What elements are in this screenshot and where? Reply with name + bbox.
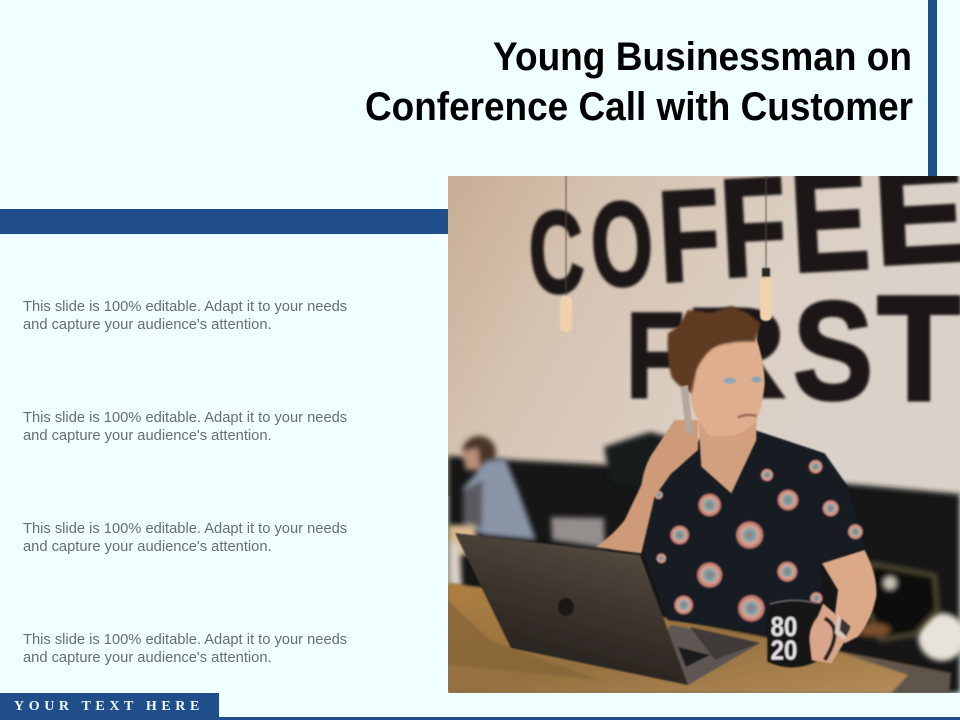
coffee mug with hand <box>767 600 851 667</box>
background table and pillow <box>448 517 960 661</box>
coffee mug with hand: 20 <box>771 634 797 665</box>
phone <box>681 385 693 435</box>
wall lettering: COFFEE FIRST: O <box>587 176 656 313</box>
text block 3: and capture your audience's attention. <box>23 539 272 555</box>
wall lettering: COFFEE FIRST: T <box>877 265 960 432</box>
text block 4: and capture your audience's attention. <box>23 650 272 666</box>
wall lettering: COFFEE FIRST: S <box>793 272 873 429</box>
shirt rosette pattern <box>654 459 863 622</box>
hair <box>668 306 761 393</box>
table <box>448 583 951 693</box>
bag <box>854 563 938 640</box>
accent bar: left horizontal <box>0 209 448 234</box>
text block 1: This slide is 100% editable. Adapt it to your needs <box>23 299 347 315</box>
text block 1: and capture your audience's attention. <box>23 317 272 333</box>
text block 3: This slide is 100% editable. Adapt it to your needs <box>23 521 347 537</box>
pendant lamps <box>560 176 772 332</box>
wall lettering: COFFEE FIRST: R <box>685 282 786 425</box>
back bench <box>448 456 960 693</box>
jacket on bench <box>604 432 680 500</box>
right arm <box>822 550 877 643</box>
laptop base <box>660 625 760 685</box>
wall lettering: COFFEE FIRST: C <box>525 186 587 319</box>
text block 1 <box>23 299 347 333</box>
businessman <box>596 417 877 667</box>
text block 4: This slide is 100% editable. Adapt it to your needs <box>23 632 347 648</box>
text block 4 <box>23 632 347 666</box>
title <box>365 35 913 129</box>
laptop logo <box>558 598 574 616</box>
text block 2: This slide is 100% editable. Adapt it to your needs <box>23 410 347 426</box>
photo: businessman on phone in coffee shop <box>448 176 960 693</box>
open neck <box>698 417 756 493</box>
text block 2: and capture your audience's attention. <box>23 428 272 444</box>
text block 3 <box>23 521 347 555</box>
coffee mug with hand: 80 <box>771 611 797 642</box>
face <box>691 338 765 437</box>
eyes and mouth <box>724 376 761 417</box>
background person <box>462 436 536 540</box>
footer tag: YOUR TEXT HERE <box>14 699 204 714</box>
footer tag <box>0 693 219 720</box>
bottom rule <box>0 717 960 720</box>
head <box>668 306 765 437</box>
laptop <box>455 533 760 685</box>
wall <box>448 176 960 496</box>
accent bar: top right vertical <box>928 0 937 176</box>
shirt <box>643 430 865 633</box>
wall lettering: COFFEE FIRST: F <box>626 288 685 424</box>
wall lettering: COFFEE FIRST <box>525 136 960 432</box>
laptop lid <box>455 533 688 685</box>
text block 2 <box>23 410 347 444</box>
raised arm and hand <box>596 420 698 553</box>
